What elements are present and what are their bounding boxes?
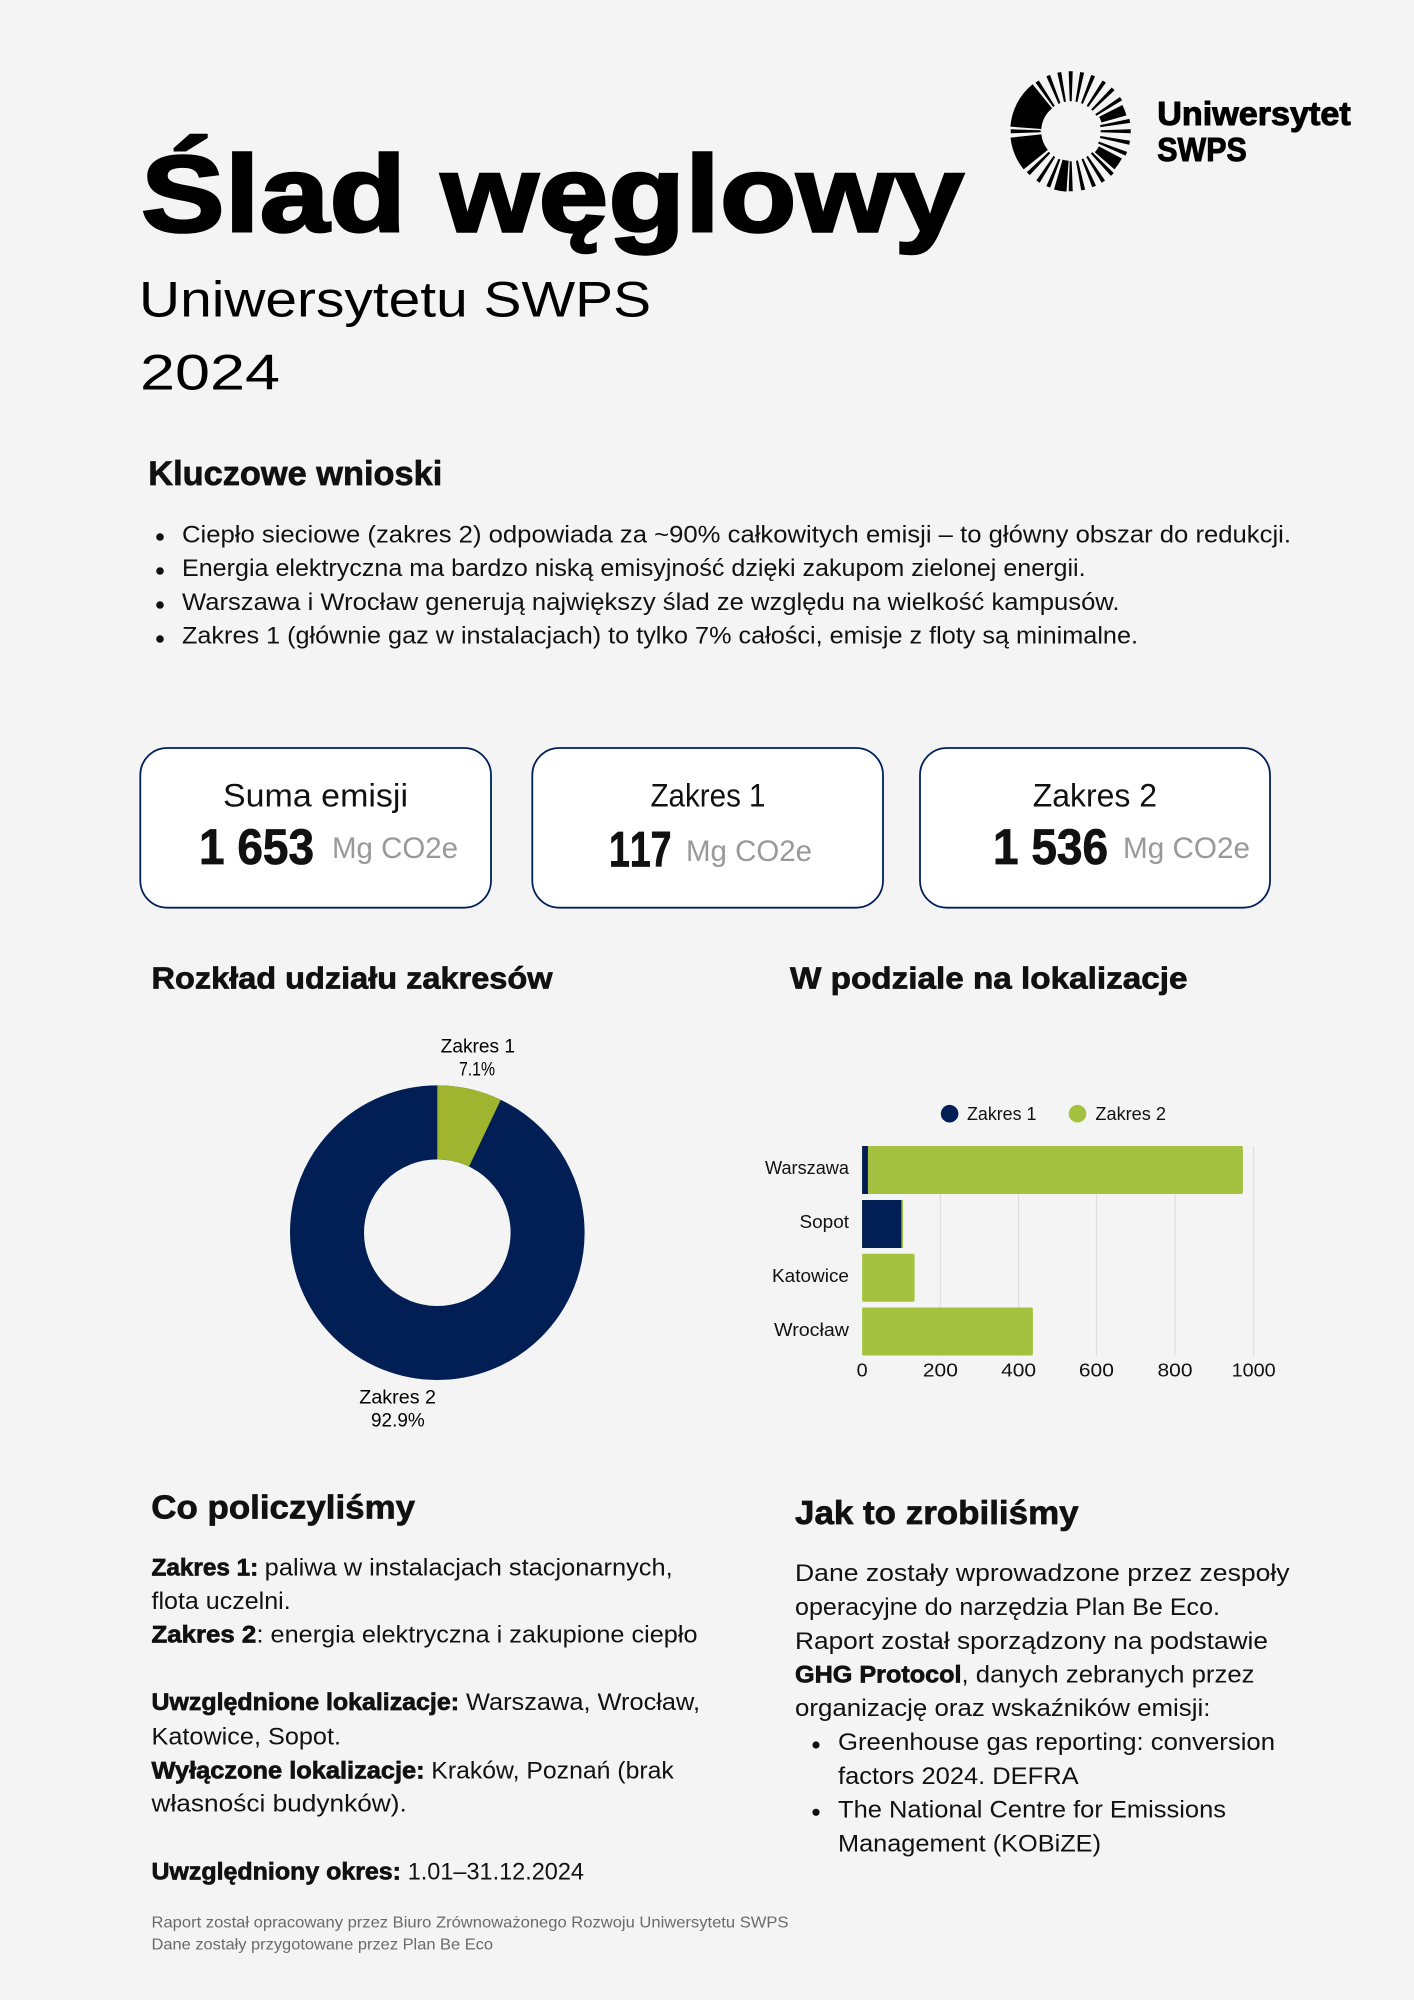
panel: how we did it — [795, 1494, 1290, 1858]
panel: KPI total emissions — [140, 748, 491, 908]
logo wordmark: Uniwersytet — [1157, 95, 1351, 132]
bullet list: sources: Greenhouse gas reporting: conversion — [838, 1729, 1275, 1756]
footer note: Raport został opracowany przez Biuro Zrównoważonego Rozwoju Uniwersytetu SWPS — [152, 1914, 788, 1931]
axis tick labels: 400 — [1001, 1361, 1036, 1381]
axis tick labels: 800 — [1158, 1361, 1192, 1381]
bullet list: sources — [812, 1729, 1275, 1858]
text block: locations: Warszawa, Wrocław, — [466, 1689, 700, 1716]
text block: method: Dane zostały wprowadzone przez zespoły — [795, 1560, 1290, 1587]
text block: method: Raport został sporządzony na podstawie — [795, 1628, 1268, 1655]
bullet list: sources: Management (KOBiZE) — [838, 1831, 1101, 1858]
icon: logo sunburst ring — [1011, 71, 1131, 191]
bullet list: sources: The National Centre for Emissions — [838, 1797, 1226, 1824]
text block: scopes: paliwa w instalacjach stacjonarnych, — [265, 1555, 673, 1582]
donut label: Zakres 1: 7.1% — [459, 1059, 495, 1080]
panel: KPI scope 1: Mg CO2e — [686, 835, 812, 868]
category labels: Katowice — [772, 1266, 849, 1286]
text block: locations: własności budynków). — [150, 1791, 407, 1818]
panel: what we counted — [150, 1488, 700, 1885]
footer note — [152, 1914, 788, 1953]
text block: locations: Katowice, Sopot. — [152, 1723, 341, 1750]
bullet list — [156, 521, 1291, 649]
axis tick labels — [857, 1361, 1276, 1381]
chart legend: Zakres 1 — [967, 1104, 1036, 1124]
chart legend: Zakres 2 — [1095, 1104, 1166, 1124]
footer note: Dane zostały przygotowane przez Plan Be Eco — [152, 1936, 493, 1953]
text block: method: , danych zebranych przez — [962, 1662, 1254, 1688]
text block: method: organizację oraz wskaźników emisji: — [795, 1695, 1210, 1722]
panel: KPI scope 1: Zakres 1 — [650, 778, 766, 814]
text block: period — [152, 1858, 584, 1885]
panel: KPI scope 2: Mg CO2e — [1123, 832, 1250, 865]
bullet list: Zakres 1 (głównie gaz w instalacjach) to tylko 7% całości, emisje z floty są minimalne. — [182, 622, 1138, 649]
text block: period: 1.01–31.12.2024 — [408, 1858, 584, 1885]
category labels — [765, 1158, 850, 1340]
donut label: Zakres 1: Zakres 1 — [441, 1037, 515, 1058]
bars — [862, 1146, 1243, 1356]
panel: KPI total emissions: Mg CO2e — [332, 832, 458, 865]
panel: KPI scope 2: 1 536 — [993, 819, 1108, 875]
category labels: Sopot — [800, 1212, 849, 1232]
text block: method — [795, 1560, 1290, 1722]
text block: locations: Wyłączone lokalizacje: — [152, 1757, 425, 1784]
bullet list: Ciepło sieciowe (zakres 2) odpowiada za ~90% całkowitych emisji – to główny obszar do redukcji. — [182, 521, 1291, 548]
heading: Jak to zrobiliśmy: Jak to zrobiliśmy — [795, 1494, 1079, 1531]
title: Ślad węglowy — [141, 134, 964, 256]
bar chart: emissions by location — [765, 1104, 1276, 1381]
subtitle: 2024 — [140, 344, 280, 400]
heading: scope share: Rozkład udziału zakresów — [152, 961, 553, 996]
text block: scopes — [152, 1555, 698, 1649]
text block: locations: Uwzględnione lokalizacje: — [152, 1689, 459, 1716]
category labels: Warszawa — [765, 1158, 850, 1178]
subtitle — [139, 272, 651, 400]
donut label: Zakres 2: 92.9% — [371, 1411, 425, 1432]
text block: locations: Kraków, Poznań (brak — [431, 1757, 675, 1784]
panel: key conclusions — [148, 455, 1291, 649]
chart legend — [941, 1104, 1166, 1124]
text block: scopes: : energia elektryczna i zakupione ciepło — [256, 1622, 698, 1649]
heading: Co policzyliśmy: Co policzyliśmy — [151, 1488, 416, 1525]
text block: method: GHG Protocol — [795, 1662, 962, 1688]
axis tick labels: 200 — [923, 1361, 958, 1381]
donut label: Zakres 2 — [359, 1387, 436, 1432]
text block: scopes: flota uczelni. — [152, 1588, 291, 1615]
axis tick labels: 1000 — [1232, 1361, 1276, 1381]
panel: KPI scope 2 — [920, 748, 1270, 908]
text block: scopes: Zakres 2 — [152, 1622, 256, 1649]
donut chart: scope share — [327, 1037, 548, 1432]
text block: locations — [150, 1689, 700, 1818]
donut label: Zakres 1 — [441, 1037, 515, 1080]
panel: KPI scope 1 — [532, 748, 883, 908]
heading: by location: W podziale na lokalizacje — [790, 961, 1188, 996]
axis tick labels: 0 — [857, 1361, 868, 1381]
category labels: Wrocław — [774, 1320, 850, 1340]
panel: KPI total emissions: 1 653 — [199, 819, 314, 875]
panel: KPI scope 2: Zakres 2 — [1033, 778, 1157, 814]
bullet list: sources: factors 2024. DEFRA — [838, 1763, 1079, 1790]
text block: method: operacyjne do narzędzia Plan Be Eco. — [795, 1594, 1220, 1621]
axis tick labels: 600 — [1079, 1361, 1114, 1381]
panel: KPI total emissions: Suma emisji — [223, 778, 408, 814]
subtitle: Uniwersytetu SWPS — [139, 272, 651, 328]
donut label: Zakres 2: Zakres 2 — [359, 1387, 436, 1408]
logo wordmark: SWPS — [1157, 131, 1247, 168]
panel: KPI scope 1: 117 — [609, 822, 672, 878]
text block: scopes: Zakres 1: — [152, 1555, 258, 1582]
bullet list: Energia elektryczna ma bardzo niską emisyjność dzięki zakupom zielonej energii. — [182, 555, 1086, 582]
logo wordmark — [1157, 95, 1351, 168]
text block: period: Uwzględniony okres: — [152, 1858, 401, 1885]
bullet list: Warszawa i Wrocław generują największy ślad ze względu na wielkość kampusów. — [182, 589, 1120, 616]
logo: Uniwersytet SWPS — [1011, 71, 1351, 191]
heading: Kluczowe wnioski: Kluczowe wnioski — [148, 455, 442, 493]
